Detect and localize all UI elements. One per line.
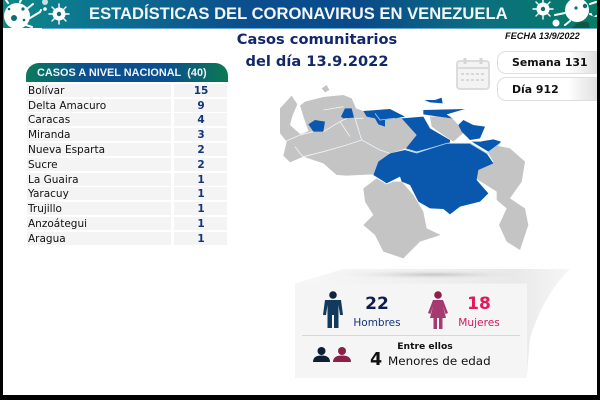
panel: national cases table: 1 bbox=[197, 203, 205, 215]
blue states with cases bbox=[308, 98, 501, 214]
state borders bbox=[285, 107, 500, 157]
men label: Hombres bbox=[353, 317, 401, 329]
panel: national cases table: Nueva Esparta bbox=[28, 144, 105, 156]
heading: community cases bbox=[237, 31, 397, 70]
icon: man bbox=[323, 291, 343, 328]
panel: national cases table: Aragua bbox=[28, 233, 66, 245]
table heading bbox=[26, 63, 228, 82]
icon: calendar bbox=[456, 58, 490, 90]
women label: Mujeres bbox=[458, 317, 500, 329]
panel: national cases table: Yaracuy bbox=[28, 188, 69, 200]
gray states bbox=[280, 85, 528, 258]
panel: national cases table: 4 bbox=[197, 114, 205, 126]
panel: national cases table: Trujillo bbox=[28, 203, 62, 215]
minors count: 4 bbox=[370, 350, 382, 370]
day label bbox=[497, 77, 597, 101]
panel: national cases table: 1 bbox=[197, 233, 205, 245]
panel: national cases table: Miranda bbox=[28, 129, 70, 141]
date label: FECHA 13/9/2022 bbox=[505, 31, 580, 41]
heading: community cases: del día 13.9.2022 bbox=[246, 53, 388, 70]
panel: national cases table bbox=[26, 63, 228, 245]
week label: Semana 131 bbox=[512, 56, 588, 69]
panel: national cases table: 1 bbox=[197, 174, 205, 186]
icon: minors bbox=[313, 347, 351, 362]
page backdrop bbox=[295, 269, 570, 378]
icon: woman bbox=[428, 291, 448, 329]
panel: gender totals bbox=[295, 269, 570, 378]
minors label: Menores de edad bbox=[388, 354, 491, 368]
map of Venezuela bbox=[280, 85, 528, 258]
table heading: CASOS A NIVEL NACIONAL (40) bbox=[37, 67, 207, 79]
panel: national cases table: 2 bbox=[197, 159, 205, 171]
men count: 22 bbox=[365, 294, 389, 314]
panel: national cases table: Caracas bbox=[28, 114, 70, 126]
panel: national cases table: 1 bbox=[197, 188, 205, 200]
panel: national cases table: Bolívar bbox=[28, 85, 64, 97]
header banner bbox=[0, 0, 600, 29]
panel: national cases table: Delta Amacuro bbox=[28, 100, 106, 112]
panel: national cases table: 9 bbox=[197, 100, 205, 112]
panel: national cases table: Sucre bbox=[28, 159, 58, 171]
title: ESTADÍSTICAS DEL CORONAVIRUS EN VENEZUELA bbox=[89, 4, 508, 23]
icons: virus decorations bbox=[3, 0, 597, 29]
panel: national cases table: La Guaira bbox=[28, 174, 79, 186]
week label bbox=[497, 51, 597, 74]
heading: community cases: Casos comunitarios bbox=[237, 31, 397, 48]
panel: national cases table: 1 bbox=[197, 218, 205, 230]
women count: 18 bbox=[467, 294, 491, 314]
day label: Día 912 bbox=[512, 83, 559, 96]
minors caption: Entre ellos bbox=[397, 341, 453, 352]
panel: national cases table: Anzoátegui bbox=[28, 218, 87, 230]
panel: national cases table: 15 bbox=[194, 85, 208, 97]
panel: national cases table: 2 bbox=[197, 144, 205, 156]
panel: national cases table: 3 bbox=[197, 129, 205, 141]
